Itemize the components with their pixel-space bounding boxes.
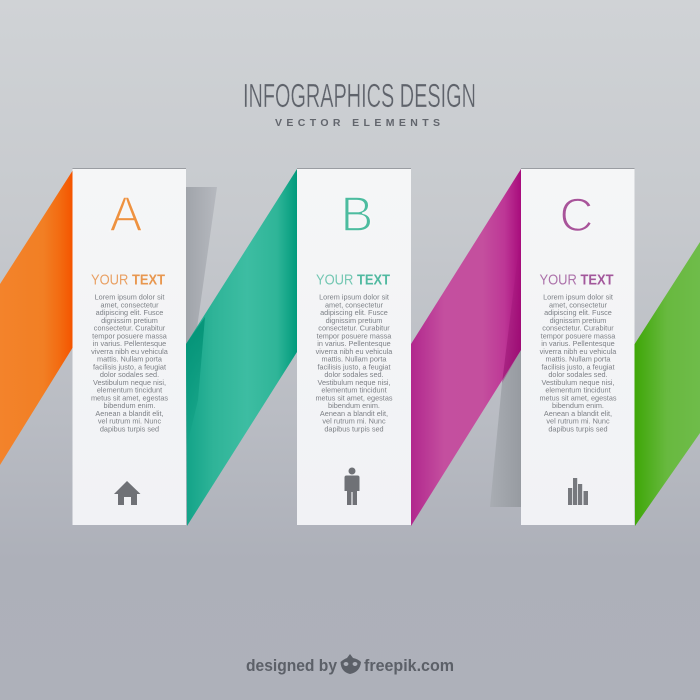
body text B: metus sit amet, egestas	[315, 393, 393, 402]
body text C: amet, consectetur	[549, 300, 608, 309]
letter C: C	[560, 188, 593, 241]
body text A: dapibus turpis sed	[100, 424, 159, 433]
body text C: Lorem ipsum dolor sit	[543, 292, 613, 302]
body text C: mattis. Nullam porta	[546, 355, 611, 364]
body text B: tempor posuere massa	[317, 331, 392, 340]
body text C: Aenean a blandit elit,	[544, 409, 612, 418]
subtitle: VECTOR ELEMENTS	[275, 117, 440, 129]
body text A: elementum tincidunt	[97, 386, 162, 395]
heading B: YOUR TEXT	[316, 272, 390, 288]
body text C: vel rutrum mi. Nunc	[546, 417, 610, 426]
teal fold	[186, 317, 205, 450]
body text C	[539, 292, 617, 433]
body text C: bibendum enim.	[552, 401, 604, 410]
footer credit: designed by	[246, 657, 338, 675]
body text B: elementum tincidunt	[321, 386, 387, 395]
body text B: Vestibulum neque nisi,	[317, 378, 391, 387]
body text A	[91, 292, 169, 433]
icon: person	[344, 468, 360, 505]
panel: card C	[521, 168, 634, 525]
body text A: Lorem ipsum dolor sit	[95, 292, 164, 302]
ribbon: orange	[0, 170, 73, 465]
body text B: vel rutrum mi. Nunc	[322, 417, 386, 426]
body text B: facilisis justo, a feugiat	[317, 362, 391, 371]
body text A: bibendum enim.	[104, 401, 155, 410]
body text C: adipiscing elit. Fusce	[544, 308, 612, 317]
icon: house	[114, 481, 140, 505]
body text C: dignissim pretium	[550, 316, 606, 325]
ribbon: magenta	[411, 169, 521, 526]
letter A: A	[110, 188, 143, 242]
body text A: vel rutrum mi. Nunc	[98, 417, 161, 426]
body text B	[315, 292, 393, 433]
body text C: metus sit amet, egestas	[539, 393, 617, 402]
body text C: dapibus turpis sed	[548, 424, 608, 433]
shadow behind card C	[490, 350, 521, 507]
body text A: metus sit amet, egestas	[91, 393, 168, 402]
body text C: facilisis justo, a feugiat	[541, 362, 615, 371]
body text C: consectetur. Curabitur	[542, 324, 614, 332]
body text C: elementum tincidunt	[545, 386, 611, 395]
body text B: bibendum enim.	[328, 401, 380, 410]
body text A: Vestibulum neque nisi,	[93, 378, 166, 387]
body text A: dolor sodales sed.	[100, 370, 159, 379]
body text C: viverra nibh eu vehicula	[540, 347, 617, 356]
panel: card B	[297, 168, 411, 525]
footer credit	[246, 654, 454, 675]
body text C: in varius. Pellentesque	[541, 339, 615, 348]
body text B: consectetur. Curabitur	[318, 324, 390, 332]
ribbon: green	[634, 242, 700, 526]
body text A: in varius. Pellentesque	[93, 339, 166, 348]
body text B: Lorem ipsum dolor sit	[319, 292, 389, 302]
icon: bar chart	[568, 478, 588, 505]
panel: card A	[72, 168, 186, 525]
body text A: dignissim pretium	[101, 316, 158, 325]
shadow behind card A	[186, 187, 217, 345]
title: INFOGRAPHICS DESIGN	[243, 78, 476, 115]
body text A: mattis. Nullam porta	[97, 355, 163, 364]
body text B: amet, consectetur	[325, 300, 384, 309]
body text B: dapibus turpis sed	[324, 424, 384, 433]
heading A: YOUR TEXT	[91, 272, 165, 288]
body text A: viverra nibh eu vehicula	[91, 347, 169, 356]
body text B: in varius. Pellentesque	[317, 339, 391, 348]
ribbon: teal	[186, 169, 297, 526]
letter B: B	[341, 188, 373, 242]
body text B: adipiscing elit. Fusce	[320, 308, 388, 317]
body text B: Aenean a blandit elit,	[320, 409, 388, 418]
body text A: tempor posuere massa	[92, 331, 168, 340]
body text A: consectetur. Curabitur	[94, 324, 166, 332]
body text A: facilisis justo, a feugiat	[93, 362, 166, 371]
heading C: YOUR TEXT	[540, 272, 614, 288]
body text A: amet, consectetur	[100, 300, 159, 309]
footer credit: freepik.com	[364, 657, 454, 675]
body text B: mattis. Nullam porta	[322, 355, 387, 364]
body text A: adipiscing elit. Fusce	[96, 308, 163, 317]
magenta fold	[502, 230, 521, 383]
body text A: Aenean a blandit elit,	[95, 409, 164, 418]
body text C: tempor posuere massa	[541, 331, 616, 340]
body text B: dignissim pretium	[326, 316, 382, 325]
body text C: Vestibulum neque nisi,	[541, 378, 615, 387]
body text C: dolor sodales sed.	[548, 370, 608, 379]
body text B: dolor sodales sed.	[324, 370, 384, 379]
body text B: viverra nibh eu vehicula	[316, 347, 393, 356]
icon: freepik logo	[340, 654, 361, 674]
